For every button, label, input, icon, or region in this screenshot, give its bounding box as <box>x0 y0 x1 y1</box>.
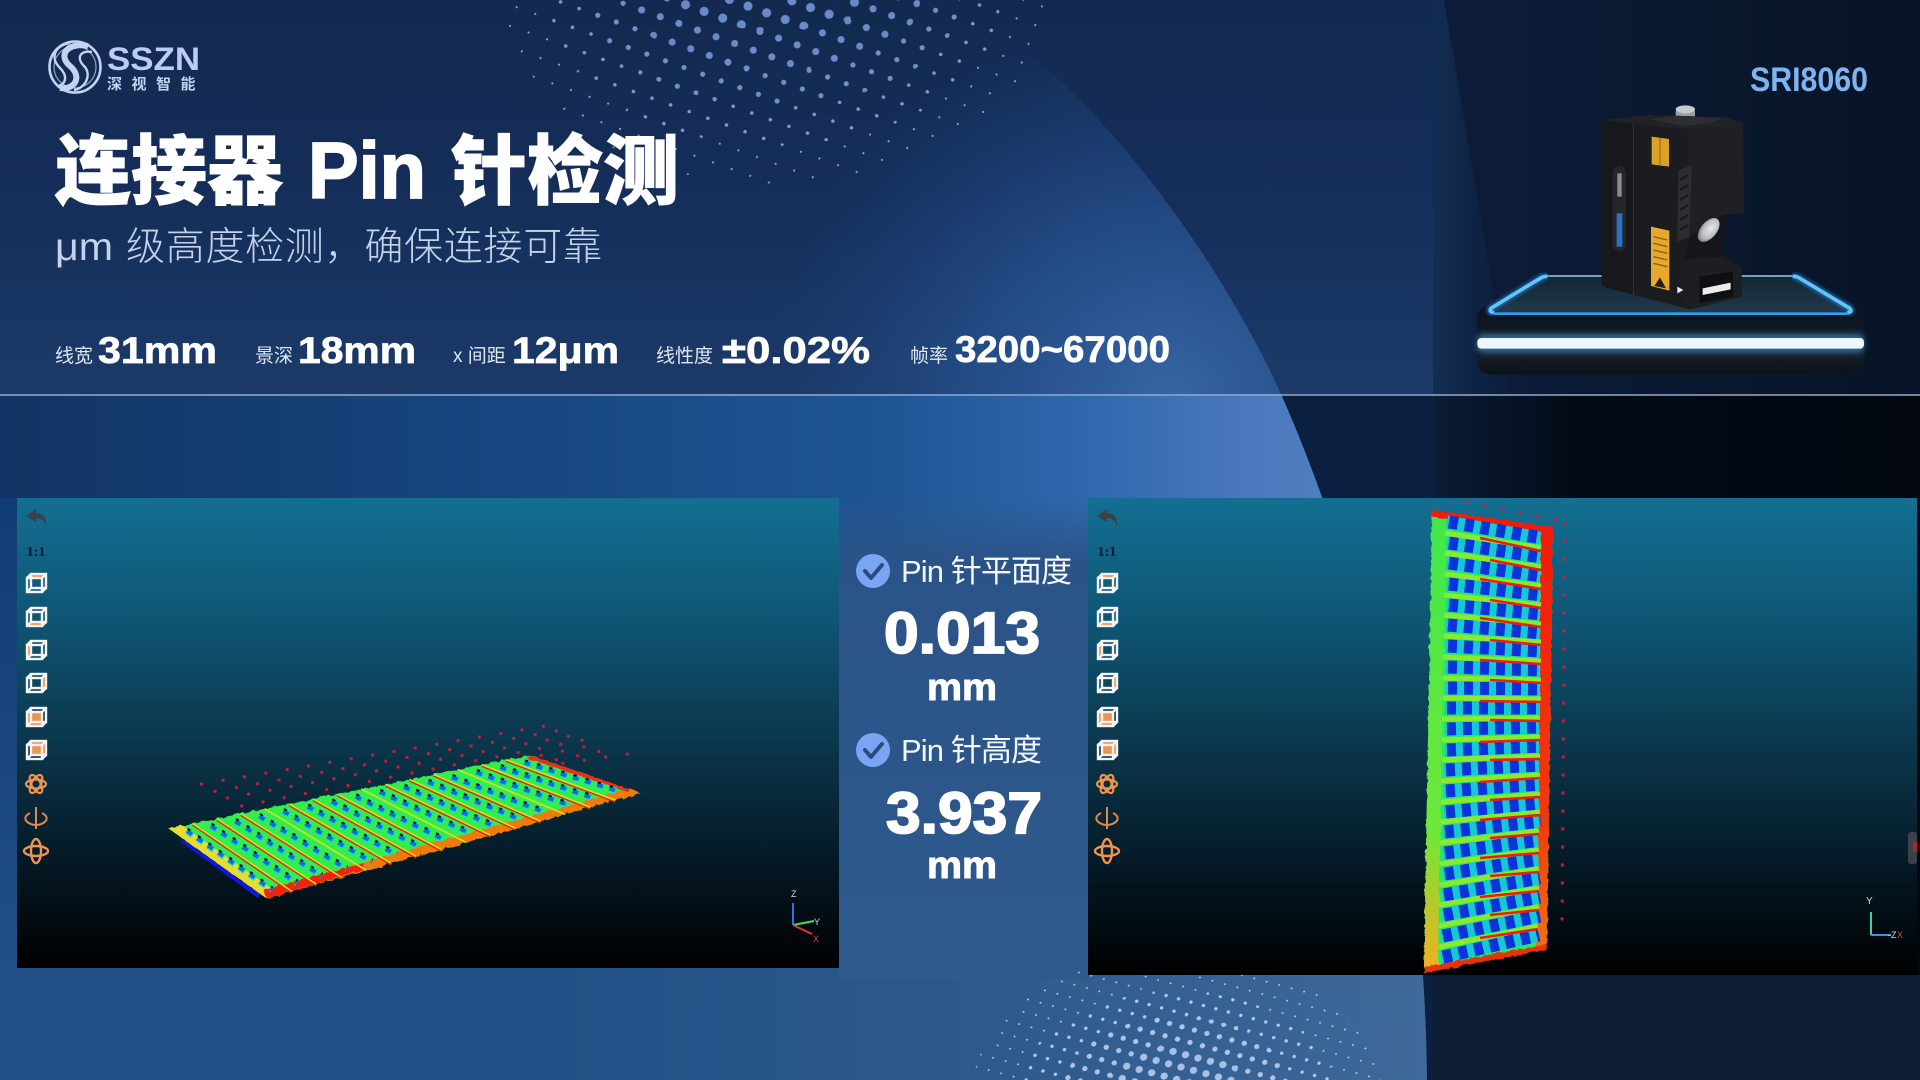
red reference dots <box>1467 502 1566 935</box>
spec: line width <box>55 330 217 371</box>
point cloud: flat view <box>168 726 640 898</box>
axes: Y <box>1866 896 1873 907</box>
metric label: flatness: Pin 针平面度 <box>901 554 1072 589</box>
logo wordmark: SSZN <box>107 41 200 77</box>
specs row <box>55 329 1170 371</box>
scale label: 1:1 <box>27 545 45 560</box>
title <box>55 126 679 215</box>
spec: depth of field: 景深 <box>255 345 293 367</box>
point cloud: top view <box>1424 502 1566 973</box>
panel: left 3D view <box>17 498 839 968</box>
axes <box>1866 896 1903 940</box>
sensor device <box>1602 105 1744 309</box>
connector plate <box>1424 510 1553 973</box>
spec: frame rate: 帧率 <box>910 345 948 367</box>
panel: right 3D view <box>1088 498 1917 975</box>
red reference dots <box>202 726 637 806</box>
spec: x spacing <box>453 330 619 371</box>
axes: X <box>813 934 819 944</box>
spec: depth of field <box>255 330 416 371</box>
halftone dots: top <box>505 0 1045 185</box>
axes: -Z <box>1888 930 1897 940</box>
pin rows <box>187 760 622 890</box>
axes <box>791 889 820 944</box>
axes: Z <box>791 889 797 899</box>
center metrics <box>856 554 1072 887</box>
toolbar icons <box>24 509 48 863</box>
logo Chinese name: 深视智能 <box>107 75 205 93</box>
spec: line width: 31mm <box>98 330 217 371</box>
halftone dots: bottom <box>973 954 1381 1080</box>
title: 连接器 <box>55 130 283 215</box>
product on platform <box>1477 105 1864 375</box>
spec: x spacing: x 间距 <box>453 345 506 367</box>
scale label: 1:1 <box>1098 545 1116 560</box>
logo <box>50 41 205 93</box>
subtitle: 级高度检测，确保连接可靠 <box>126 226 602 269</box>
subtitle: μm <box>55 226 113 269</box>
spec: frame rate: 3200~67000 <box>955 329 1170 370</box>
metric value: flatness: 0.013 <box>884 601 1040 666</box>
metric label: height: Pin 针高度 <box>901 733 1042 768</box>
pin rows <box>1441 522 1542 957</box>
edge handle <box>1908 832 1917 864</box>
model name: SRI8060 <box>1750 61 1868 99</box>
spec: linearity: ±0.02% <box>722 330 870 371</box>
spec: x spacing: 12μm <box>512 330 619 371</box>
spec: linearity <box>656 330 870 371</box>
toolbar icons <box>1095 509 1119 863</box>
axes: Y <box>814 917 820 927</box>
title: Pin <box>308 126 426 215</box>
spec: linearity: 线性度 <box>656 345 713 367</box>
spec: line width: 线宽 <box>55 345 93 367</box>
logo mark <box>50 42 100 92</box>
metric value: height: 3.937 <box>886 781 1042 846</box>
rib lines <box>192 760 615 893</box>
axes: X <box>1897 930 1903 940</box>
check icon <box>856 554 890 588</box>
rib lines <box>1439 533 1541 947</box>
title: 针检测 <box>451 130 679 215</box>
check icon <box>856 733 890 767</box>
divider line <box>0 394 1920 396</box>
connector plate <box>168 755 640 898</box>
metric unit: flatness: mm <box>927 667 997 709</box>
platform <box>1477 275 1864 375</box>
spec: depth of field: 18mm <box>298 330 416 371</box>
metric unit: height: mm <box>927 845 997 887</box>
